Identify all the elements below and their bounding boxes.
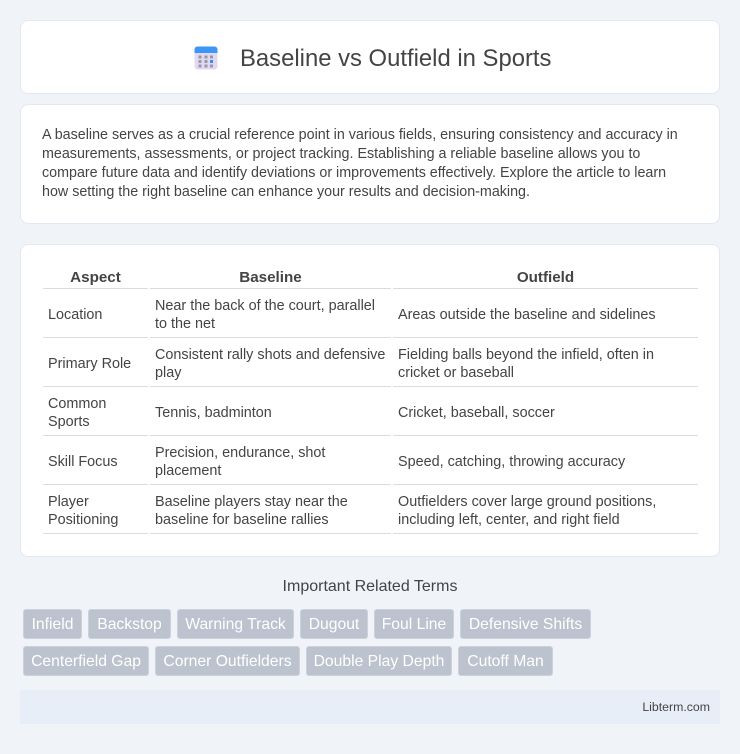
tag: Backstop <box>88 609 171 639</box>
table header: Outfield <box>517 269 574 286</box>
related term tags <box>23 609 591 676</box>
table header <box>43 269 698 289</box>
header panel <box>20 20 720 94</box>
icon: calendar <box>194 46 218 70</box>
row: common sports: Cricket, baseball, soccer <box>398 405 555 421</box>
row: player positioning: Positioning <box>48 512 118 528</box>
row: player positioning: including left, center, and right field <box>398 512 620 528</box>
row: skill focus: Precision, endurance, shot <box>155 445 325 461</box>
tag: Dugout <box>300 609 368 639</box>
table header: Aspect <box>70 269 121 286</box>
row: skill focus: placement <box>155 463 221 479</box>
intro text: how setting the right baseline can enhance your results and decision-making. <box>42 184 530 200</box>
row: location: Location <box>48 307 102 323</box>
row: primary role: Consistent rally shots and defensive <box>155 347 385 363</box>
comparison table panel <box>20 244 720 557</box>
tag: Double Play Depth <box>306 646 452 676</box>
tag: Foul Line: Foul Line <box>382 616 446 633</box>
tag: Corner Outfielders: Corner Outfielders <box>163 653 292 670</box>
tag: Double Play Depth: Double Play Depth <box>314 653 444 670</box>
row: primary role: Primary Role <box>48 356 131 372</box>
tag: Foul Line <box>374 609 454 639</box>
row: common sports: Tennis, badminton <box>155 405 272 421</box>
row: player positioning: Player <box>48 494 89 510</box>
tag: Warning Track <box>177 609 294 639</box>
tag: Defensive Shifts: Defensive Shifts <box>469 616 582 633</box>
tag: Backstop: Backstop <box>97 616 162 633</box>
tag: Cutoff Man <box>458 646 553 676</box>
tag: Warning Track: Warning Track <box>185 616 286 633</box>
row: location: to the net <box>155 316 215 332</box>
row: primary role: cricket or baseball <box>398 365 514 381</box>
table header: Baseline <box>239 269 302 286</box>
row: skill focus <box>43 445 698 485</box>
intro text <box>42 127 678 200</box>
intro text: compare future data and identify deviations or improvements effectively. Explore the article to learn <box>42 165 666 181</box>
row: primary role: play <box>155 365 181 381</box>
tag: Centerfield Gap: Centerfield Gap <box>31 653 141 670</box>
footer bar <box>20 690 720 724</box>
row: skill focus: Speed, catching, throwing accuracy <box>398 454 625 470</box>
tag: Infield: Infield <box>32 616 73 633</box>
intro text: A baseline serves as a crucial reference point in various fields, ensuring consistency and accuracy in <box>42 127 678 143</box>
footer credit: Libterm.com <box>642 700 710 714</box>
row: skill focus: Skill Focus <box>48 454 118 470</box>
tag: Defensive Shifts <box>460 609 591 639</box>
row: player positioning: Outfielders cover large ground positions, <box>398 494 656 510</box>
tag: Centerfield Gap <box>23 646 149 676</box>
row: player positioning <box>43 494 698 534</box>
row: primary role: Fielding balls beyond the infield, often in <box>398 347 654 363</box>
row: player positioning: baseline for baseline rallies <box>155 512 329 528</box>
related terms heading: Important Related Terms <box>283 578 457 595</box>
intro text: measurements, assessments, or project tracking. Establishing a reliable baseline allows you to <box>42 146 640 162</box>
intro panel <box>20 104 720 224</box>
tag: Dugout: Dugout <box>309 616 359 633</box>
row: common sports: Common <box>48 396 106 412</box>
row: common sports: Sports <box>48 414 90 430</box>
title: Baseline vs Outfield in Sports <box>240 45 551 72</box>
row: common sports <box>43 396 698 436</box>
row: location: Near the back of the court, parallel <box>155 298 375 314</box>
tag: Infield <box>23 609 82 639</box>
row: location: Areas outside the baseline and sidelines <box>398 307 656 323</box>
row: primary role <box>43 347 698 387</box>
tag: Corner Outfielders <box>155 646 300 676</box>
row: player positioning: Baseline players stay near the <box>155 494 348 510</box>
tag: Cutoff Man: Cutoff Man <box>467 653 544 670</box>
row: location <box>43 298 698 338</box>
